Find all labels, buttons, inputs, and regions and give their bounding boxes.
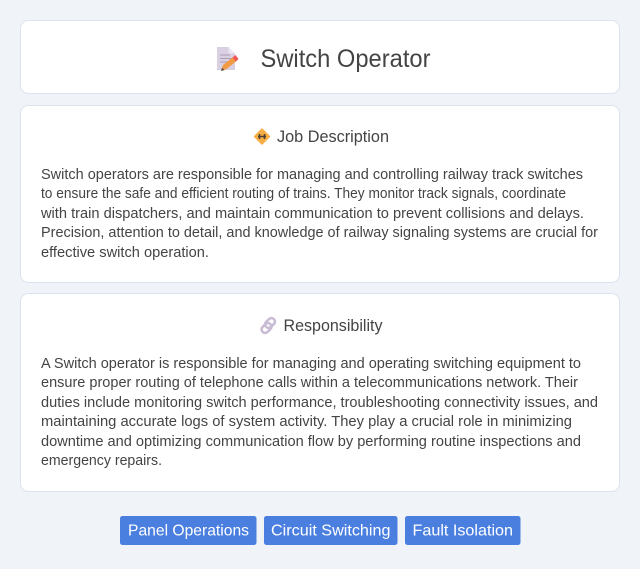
text block: responsibility: duties include monitoring switch performance, troubleshooting connectivity issues, and [41, 394, 598, 411]
heading: responsibility: Responsibility [284, 316, 383, 335]
text block: job description: Switch operators are responsible for managing and controlling railway track switches [41, 166, 583, 183]
text block: job description: effective switch operation. [41, 244, 209, 261]
tag: fault isolation [405, 516, 520, 545]
text block: responsibility: A Switch operator is responsible for managing and operating switching equipment to [41, 355, 581, 372]
text block: responsibility: ensure proper routing of telephone calls within a telecommunications network. Their [41, 374, 578, 391]
text block: job description: Precision, attention to detail, and knowledge of railway signaling systems are crucial for [41, 224, 598, 241]
panel: job description [20, 106, 620, 282]
panel: title [20, 20, 620, 94]
tag: panel operations [120, 516, 256, 545]
text block: responsibility: downtime and optimizing communication flow by performing routine inspections and [41, 433, 581, 450]
text block: responsibility: emergency repairs. [41, 452, 162, 469]
panel: responsibility [20, 294, 620, 492]
tag: circuit switching [264, 516, 398, 545]
heading: job description: Job Description [277, 127, 389, 146]
text block: job description: to ensure the safe and efficient routing of trains. They monitor track signals, coordinate [41, 185, 566, 202]
text block: job description [40, 166, 598, 261]
text block: responsibility [41, 355, 598, 469]
icon: memo with pencil [217, 47, 238, 71]
icon: railway sign [254, 129, 270, 144]
text block: responsibility: maintaining accurate logs of system activity. They play a crucial role in minimizing [41, 413, 572, 430]
title text: Switch Operator [260, 45, 430, 73]
icon: link [260, 317, 276, 334]
tag: fault isolation: Fault Isolation [412, 522, 513, 540]
tag: circuit switching: Circuit Switching [271, 522, 390, 540]
tag: panel operations: Panel Operations [128, 522, 249, 540]
text block: job description: with train dispatchers, and maintain communication to prevent collisions and delays. [40, 205, 584, 222]
